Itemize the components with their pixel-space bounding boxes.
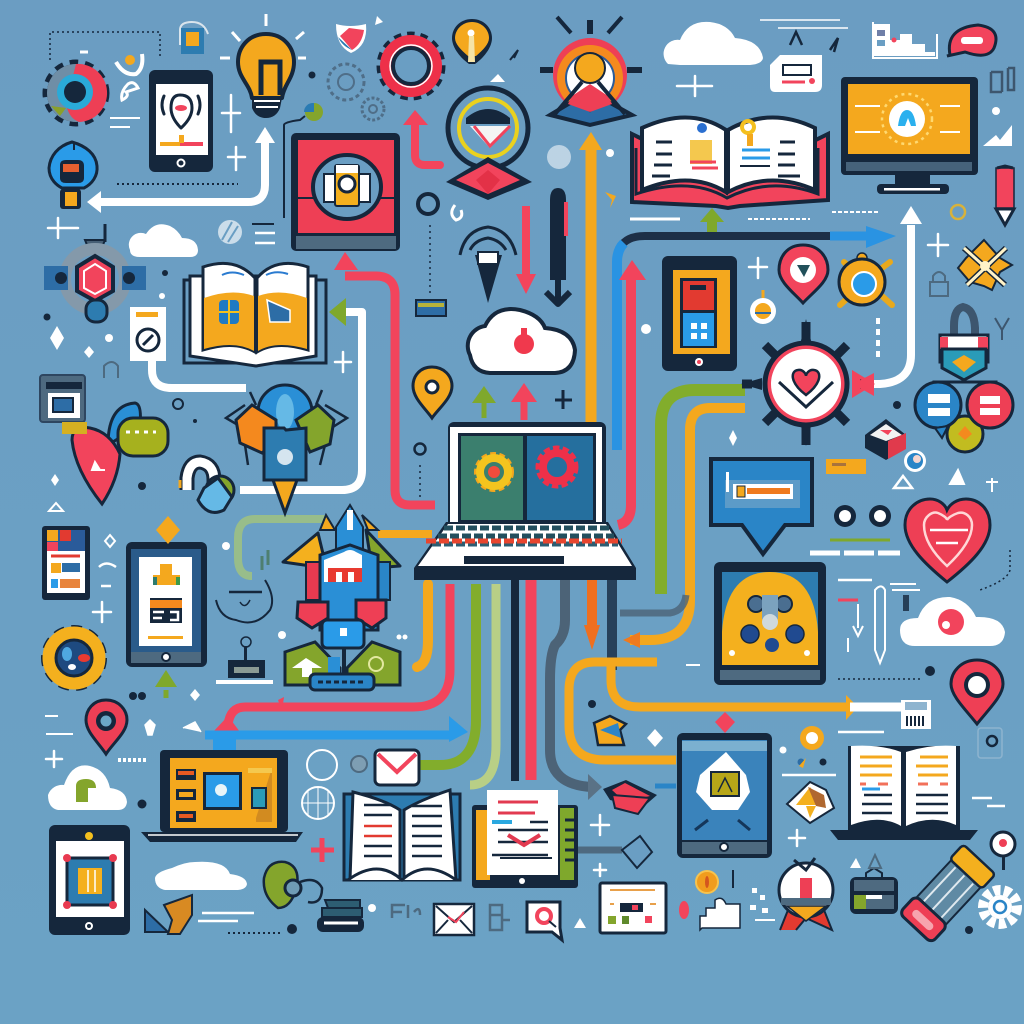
icon: lock stack and speech bubbles [915, 307, 1013, 452]
icon: blue padlock badge [49, 142, 97, 209]
icon: badge with no symbol [130, 307, 166, 361]
icon: laptop orange [141, 750, 303, 842]
arrow: orange to laptop [378, 530, 432, 538]
arrow: orange long from laptop [630, 408, 745, 640]
icon: graduation house [594, 716, 626, 745]
decoration: small dots [44, 72, 1000, 934]
icon: small envelope bottom [434, 904, 474, 935]
decoration: dashed lines [50, 20, 1010, 806]
icon: cloud white top [664, 22, 763, 65]
icon: book stack [317, 900, 364, 932]
icon: laptop with gears [414, 422, 636, 580]
icon: sun lamp [782, 729, 836, 775]
icon: colourful phone left [42, 526, 90, 600]
arrow: red up turn beside gem [403, 110, 440, 165]
arrow: navy pen downward [546, 188, 570, 304]
arrow: grey connector to orange [620, 595, 686, 613]
icon: heart badge [905, 499, 990, 582]
arrow: blue and navy to right [617, 226, 896, 450]
arrow: pale green to book [470, 584, 496, 785]
arrow: small green under book [700, 208, 724, 232]
icon: swirl symbol [116, 54, 142, 100]
icon: hex shield cross [44, 224, 146, 322]
icon: tablet with app [126, 542, 207, 667]
icon: small card [770, 32, 838, 92]
icon: gold location pin [413, 367, 452, 418]
icon: link chain [180, 462, 234, 512]
arrow: green up to cloud [472, 386, 496, 418]
icon: ornament globe [779, 858, 833, 930]
icon: briefcase bag [850, 868, 898, 914]
icon: red diamond [715, 712, 735, 733]
icon: multicolour gear [47, 64, 107, 122]
arrow: pale green to rocket [238, 519, 326, 576]
icon: capsule tube [899, 844, 995, 943]
icon: small paper lock [978, 728, 1002, 758]
arrow: green to envelope [420, 584, 476, 765]
icon: grey gears sketch [328, 64, 384, 120]
icon: puzzle hand [679, 898, 740, 930]
icon: open book colorful [632, 117, 828, 208]
icon: red tablet camera [284, 103, 400, 251]
icon: small blue circle [904, 450, 926, 472]
icon: globes outline [302, 750, 367, 819]
arrows: down from laptop [515, 580, 612, 800]
icon: folded paper pen [145, 895, 192, 934]
icon: barcode tag [901, 700, 931, 729]
icon: cube [865, 419, 906, 460]
icon: red pin [86, 700, 127, 754]
arrow: left orange from laptop [417, 584, 428, 667]
icon: tablet with chip [49, 825, 130, 935]
icon: white cloud centre [468, 309, 575, 373]
arrow: red up to phone [618, 260, 646, 525]
icon: white cloud green mark [48, 765, 127, 810]
icon: envelope [375, 750, 419, 785]
icon: search speech bubble [527, 902, 562, 940]
icon: white gear [983, 890, 1017, 924]
icon: phone with location pin [149, 70, 213, 172]
icon: diamond connector [578, 836, 652, 868]
icon: stamp stand [216, 637, 273, 684]
decoration: plus marks [46, 76, 948, 876]
icon: head profile outline [216, 580, 272, 622]
icon: orange turtle gear [839, 253, 892, 305]
icon: small ring [418, 194, 438, 214]
arrow: red downward [516, 206, 536, 294]
icon: small orange medal [750, 290, 776, 324]
icon: connected hexagon rocket [226, 385, 347, 513]
icon: white cloud red mark [900, 597, 1005, 646]
icon: open book lined [344, 790, 460, 880]
arrow: red from laptop to tablet [334, 252, 435, 505]
icon: orange pin with light [452, 19, 492, 64]
icon: red gear [381, 36, 441, 96]
icon: phone colourful [662, 256, 737, 371]
icon: notebook tablet [472, 790, 578, 888]
arrow: orange loop to tablet [569, 662, 676, 760]
arrow: red up to cloud [511, 383, 537, 420]
icon: red graduation box [603, 780, 676, 814]
icon: tablet golden arch [714, 562, 826, 685]
arrow: orange and white line to barcode [611, 665, 905, 720]
icon: speech bubble panel [711, 459, 812, 554]
icon: shield [336, 24, 366, 53]
icon: chat bubbles green and red [72, 403, 168, 504]
decoration: striped disc [218, 220, 242, 244]
arrow: white upward to monitor [852, 206, 922, 398]
icon: orange diamond star [156, 516, 180, 544]
icon: twin characters [810, 505, 900, 553]
icon: yellow gear [48, 632, 100, 684]
icon: chart panel [873, 22, 937, 58]
arrow: orange tip [623, 632, 640, 648]
icon: tablet with shield [677, 733, 772, 858]
icon: desktop monitor [841, 77, 978, 194]
icon: text lines bottom [198, 913, 297, 934]
icon: pin green ring [951, 660, 1003, 724]
icon: red speech bubble [947, 25, 996, 56]
decoration: white diamond stars [50, 326, 737, 747]
arrow: small green up [155, 670, 177, 698]
icon: dashboard card [600, 883, 666, 933]
arrow: white connector from badge [152, 360, 246, 388]
icon: open book orange [184, 263, 326, 366]
icon: white cloud bottom [155, 862, 247, 890]
icon: green globe ring [264, 862, 322, 908]
icon: small chart right [983, 125, 1012, 146]
icon: cloud small left [129, 224, 198, 257]
icon: light bulb [220, 14, 306, 118]
icon: note symbol [991, 68, 1014, 92]
icon: pencil [996, 166, 1014, 225]
icon: red pin T [779, 245, 828, 303]
icon: gem graduation emblem [446, 88, 532, 200]
arrow: white from phone area to bulb and badge [87, 127, 275, 213]
icon: server module [40, 375, 87, 434]
arrow: green to heart gear [661, 390, 745, 594]
icon: small app badge top [180, 22, 208, 54]
icon: open book on laptop [830, 746, 978, 840]
icon: orange tag [826, 459, 866, 474]
icon: orange target with rays [540, 17, 642, 125]
arrow: red and blue to laptop panel [205, 584, 468, 751]
icon: gear with heart [741, 319, 874, 446]
icon: flag chart [416, 300, 446, 316]
icon: rocket network [283, 505, 400, 690]
icon: wifi bell [460, 227, 516, 303]
icon: magnifier pin [991, 832, 1015, 870]
icon: house gem [787, 782, 834, 823]
icon: orange coin [696, 870, 733, 893]
icon: star cross [958, 240, 1012, 290]
arrow: white and green to book [240, 298, 362, 490]
arrow: orange vertical up [579, 132, 602, 425]
